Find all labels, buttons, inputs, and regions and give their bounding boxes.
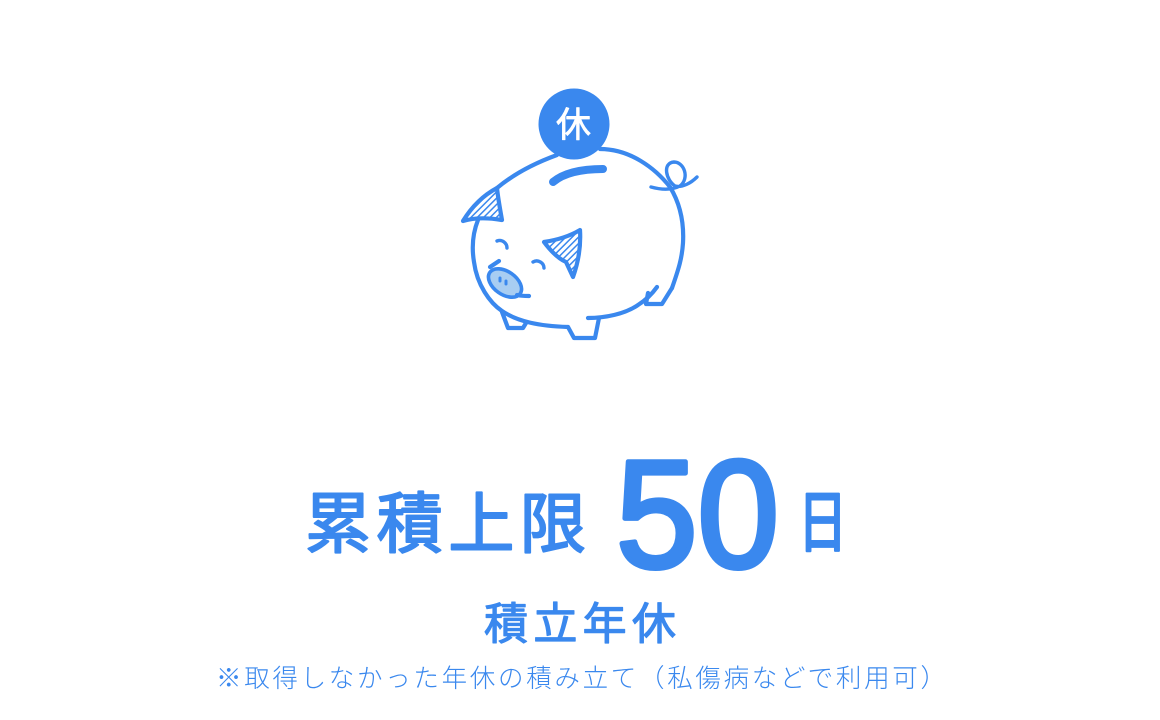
pig body outline xyxy=(473,149,683,327)
coin label: 休 xyxy=(556,106,591,145)
big number 50: 50 xyxy=(616,429,779,600)
curly tail xyxy=(651,162,697,189)
nostrils xyxy=(500,278,506,284)
coin slot xyxy=(553,169,603,182)
subheading: 積立年休 xyxy=(484,600,676,649)
footnote: ※取得しなかった年休の積み立て（私傷病などで利用可） xyxy=(216,665,946,693)
icon: piggy bank with coin xyxy=(463,88,697,338)
pig left ear xyxy=(463,188,502,221)
heading: cumulative limit: 累積上限 xyxy=(305,487,586,561)
pig eye left xyxy=(497,240,507,248)
pig front right foot xyxy=(568,318,599,338)
pig rear foot xyxy=(646,288,672,304)
pig right ear xyxy=(544,230,580,277)
pig eye right xyxy=(533,261,544,268)
pig front left foot xyxy=(502,312,526,328)
snout top line xyxy=(490,261,499,267)
snout bottom line xyxy=(517,295,529,296)
pig snout xyxy=(483,263,527,303)
coin circle xyxy=(538,88,610,160)
unit: day: 日 xyxy=(798,487,847,561)
